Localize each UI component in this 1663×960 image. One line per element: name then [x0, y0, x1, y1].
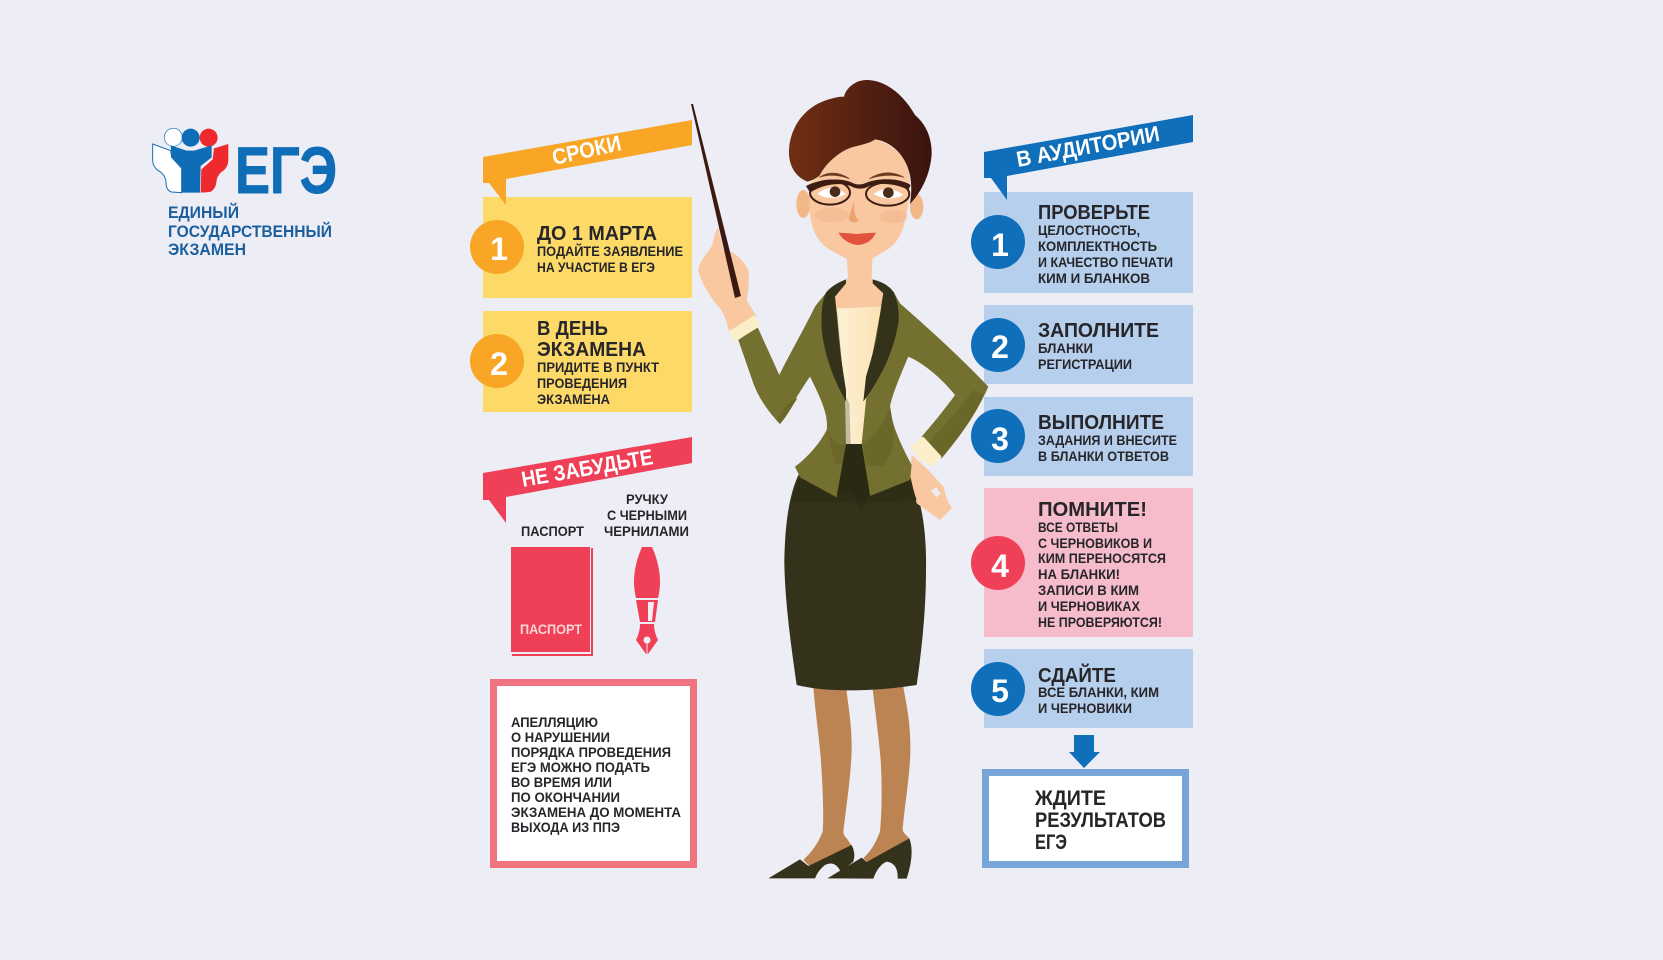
- ribbon: в аудитории: В АУДИТОРИИ: [1014, 121, 1161, 172]
- panel: помните: [971, 488, 1193, 637]
- eyes: [817, 188, 846, 198]
- panel: ждите результатов: [986, 772, 1186, 864]
- icon: fountain pen: [634, 547, 660, 654]
- hair: [789, 80, 932, 204]
- label: паспорт: ПАСПОРТ: [521, 524, 585, 539]
- icon: three figures: [153, 128, 228, 193]
- callout: апелляция: ВО ВРЕМЯ ИЛИ: [511, 775, 612, 790]
- panel: помните: КИМ ПЕРЕНОСЯТСЯ: [1038, 551, 1166, 566]
- logo subtitle: [168, 203, 332, 259]
- panel: помните: И ЧЕРНОВИКАХ: [1038, 599, 1140, 614]
- panel: помните: НА БЛАНКИ!: [1038, 567, 1120, 582]
- lapels: [822, 279, 846, 402]
- panel: ждите результатов: ЖДИТЕ: [1034, 787, 1106, 810]
- skirt shadow: [791, 477, 917, 511]
- panel: ждите результатов: РЕЗУЛЬТАТОВ: [1035, 809, 1166, 832]
- panel: помните: ПОМНИТЕ!: [1038, 499, 1147, 521]
- panel: сдайте: [971, 649, 1193, 728]
- logo subtitle: ЕДИНЫЙ: [168, 203, 239, 222]
- ribbon: сроки: [483, 120, 692, 205]
- logo: ЕГЭ: [153, 128, 337, 259]
- panel: помните: ЗАПИСИ В КИМ: [1038, 583, 1139, 598]
- callout: апелляция: ПО ОКОНЧАНИИ: [511, 790, 620, 805]
- panel: помните: 4: [991, 548, 1009, 584]
- lips: [838, 233, 876, 245]
- panel: ждите результатов: ЕГЭ: [1035, 831, 1067, 854]
- panel: сдайте: И ЧЕРНОВИКИ: [1038, 701, 1132, 716]
- label: ручку с черными чернилами: С ЧЕРНЫМИ: [607, 508, 687, 523]
- panel: заполните: БЛАНКИ: [1038, 341, 1093, 356]
- figure: teacher: [698, 80, 988, 879]
- panel: проверьте: ЦЕЛОСТНОСТЬ,: [1038, 223, 1140, 238]
- icon: passport: [511, 547, 593, 656]
- ribbon: в аудитории: [984, 115, 1193, 200]
- panel: выполните: [971, 397, 1193, 476]
- ears: [796, 190, 810, 218]
- panel: выполните: ЗАДАНИЯ И ВНЕСИТЕ: [1038, 433, 1177, 448]
- raised hand: [698, 227, 757, 333]
- skirt: [784, 475, 926, 690]
- panel: до 1 марта: [470, 197, 692, 298]
- panel: заполните: РЕГИСТРАЦИИ: [1038, 357, 1132, 372]
- jacket shading: [777, 390, 983, 467]
- ribbon: не забудьте: [483, 437, 692, 523]
- panel: в день экзамена: В ДЕНЬ: [537, 318, 608, 340]
- callout: апелляция: ПОРЯДКА ПРОВЕДЕНИЯ: [511, 745, 671, 760]
- neck: [846, 250, 873, 278]
- logo subtitle: ГОСУДАРСТВЕННЫЙ: [168, 222, 332, 241]
- ribbon: сроки: СРОКИ: [550, 130, 623, 170]
- panel: до 1 марта: 1: [490, 231, 508, 267]
- callout: апелляция: ВЫХОДА ИЗ ППЭ: [511, 820, 620, 835]
- panel: до 1 марта: НА УЧАСТИЕ В ЕГЭ: [537, 260, 655, 275]
- panel: помните: С ЧЕРНОВИКОВ И: [1038, 536, 1152, 551]
- blush: [815, 208, 848, 222]
- panel: сдайте: 5: [991, 673, 1009, 709]
- panel: проверьте: КОМПЛЕКТНОСТЬ: [1038, 239, 1157, 254]
- cuffs: [728, 315, 759, 342]
- logo wordmark: ЕГЭ: [235, 133, 337, 207]
- panel: в день экзамена: ЭКЗАМЕНА: [537, 392, 610, 407]
- panel: заполните: [971, 305, 1193, 384]
- hip hand: [910, 455, 952, 520]
- label: ручку с черными чернилами: [604, 492, 689, 539]
- shirt shadow: [845, 395, 851, 444]
- panel: проверьте: ПРОВЕРЬТЕ: [1038, 202, 1150, 224]
- callout: апелляция: ЕГЭ МОЖНО ПОДАТЬ: [511, 760, 650, 775]
- label: ручку с черными чернилами: ЧЕРНИЛАМИ: [604, 524, 689, 539]
- panel: проверьте: И КАЧЕСТВО ПЕЧАТИ: [1038, 255, 1173, 270]
- legs: [803, 687, 910, 867]
- callout: апелляция: ЭКЗАМЕНА ДО МОМЕНТА: [511, 805, 681, 820]
- skirt waist: [837, 444, 870, 510]
- icon: passport: ПАСПОРТ: [520, 621, 582, 637]
- logo subtitle: ЭКЗАМЕН: [168, 241, 246, 259]
- panel: сдайте: ВСЕ БЛАНКИ, КИМ: [1038, 685, 1159, 700]
- panel: проверьте: КИМ И БЛАНКОВ: [1038, 271, 1150, 286]
- panel: в день экзамена: ЭКЗАМЕНА: [537, 339, 646, 361]
- callout: апелляция: [494, 682, 694, 864]
- jacket: [738, 292, 988, 497]
- panel: сдайте: СДАЙТЕ: [1038, 663, 1116, 687]
- panel: выполните: ВЫПОЛНИТЕ: [1038, 412, 1164, 434]
- panel: в день экзамена: ПРОВЕДЕНИЯ: [537, 376, 627, 391]
- shirt: [837, 307, 881, 444]
- callout: апелляция: О НАРУШЕНИИ: [511, 730, 610, 745]
- panel: заполните: ЗАПОЛНИТЕ: [1038, 320, 1159, 342]
- panel: проверьте: [971, 192, 1193, 293]
- face: [809, 139, 910, 262]
- glasses: [810, 181, 909, 206]
- panel: помните: ВСЕ ОТВЕТЫ: [1038, 520, 1118, 535]
- panel: в день экзамена: [470, 311, 692, 412]
- panel: выполните: В БЛАНКИ ОТВЕТОВ: [1038, 449, 1169, 464]
- panel: в день экзамена: ПРИДИТЕ В ПУНКТ: [537, 360, 660, 375]
- panel: проверьте: 1: [991, 227, 1009, 263]
- eyebrows: [819, 173, 904, 179]
- panel: до 1 марта: ПОДАЙТЕ ЗАЯВЛЕНИЕ: [537, 244, 683, 259]
- shoes: [768, 838, 912, 879]
- panel: помните: НЕ ПРОВЕРЯЮТСЯ!: [1038, 615, 1162, 630]
- callout: апелляция: АПЕЛЛЯЦИЮ: [511, 715, 598, 730]
- pointer stick: [691, 104, 741, 298]
- nose: [848, 202, 859, 222]
- panel: до 1 марта: ДО 1 МАРТА: [537, 223, 657, 245]
- panel: заполните: 2: [991, 329, 1009, 365]
- label: ручку с черными чернилами: РУЧКУ: [626, 492, 669, 507]
- panel: в день экзамена: 2: [490, 346, 508, 382]
- chest: [835, 277, 883, 312]
- arrow: down: [1069, 735, 1100, 768]
- ribbon: не забудьте: НЕ ЗАБУДЬТЕ: [520, 444, 655, 492]
- panel: выполните: 3: [991, 421, 1009, 457]
